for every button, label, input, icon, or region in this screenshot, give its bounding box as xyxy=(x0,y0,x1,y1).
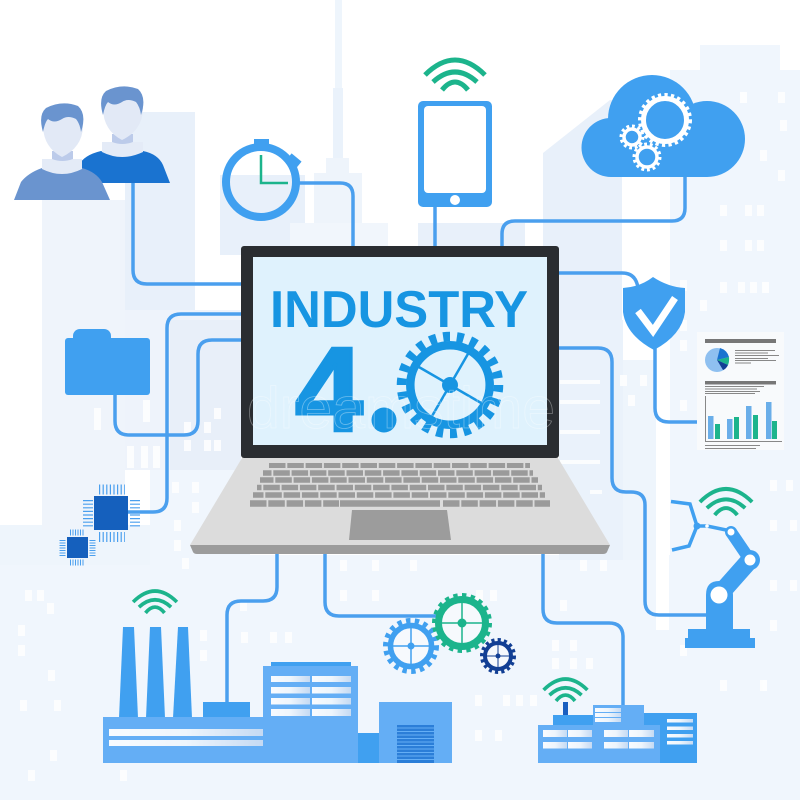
icon: two users xyxy=(14,86,170,200)
connector lines xyxy=(115,175,708,706)
gear: green xyxy=(434,596,490,650)
icon: stopwatch xyxy=(226,139,302,217)
bar chart xyxy=(708,402,777,439)
watermark: dreamstime xyxy=(247,376,555,441)
gear: blue xyxy=(386,620,436,672)
icon: folder xyxy=(65,329,150,395)
icon: three gears xyxy=(386,596,514,672)
heading: INDUSTRY: INDUSTRY xyxy=(270,281,528,339)
laptop xyxy=(190,246,610,554)
back user xyxy=(79,86,170,183)
icon: microchips xyxy=(62,490,135,562)
icon: factory with wifi xyxy=(103,591,452,763)
laptop bezel xyxy=(241,246,559,458)
keyboard xyxy=(250,466,550,504)
panel: analytics report xyxy=(697,332,784,450)
decimal point xyxy=(372,408,396,432)
icon: security shield xyxy=(623,277,685,350)
icon: smart building with wifi xyxy=(538,679,697,763)
icon: robot arm with wifi xyxy=(671,489,760,648)
pie chart xyxy=(705,348,729,372)
trackpad xyxy=(349,510,451,540)
icon: cloud with gears xyxy=(582,75,745,177)
gear as zero xyxy=(402,336,498,434)
laptop base xyxy=(190,458,610,545)
icon: smartphone with wifi xyxy=(418,60,492,207)
front user xyxy=(14,103,110,200)
screen xyxy=(253,257,547,445)
heading: 4.: 4 xyxy=(295,323,363,457)
gear: navy xyxy=(482,640,514,672)
